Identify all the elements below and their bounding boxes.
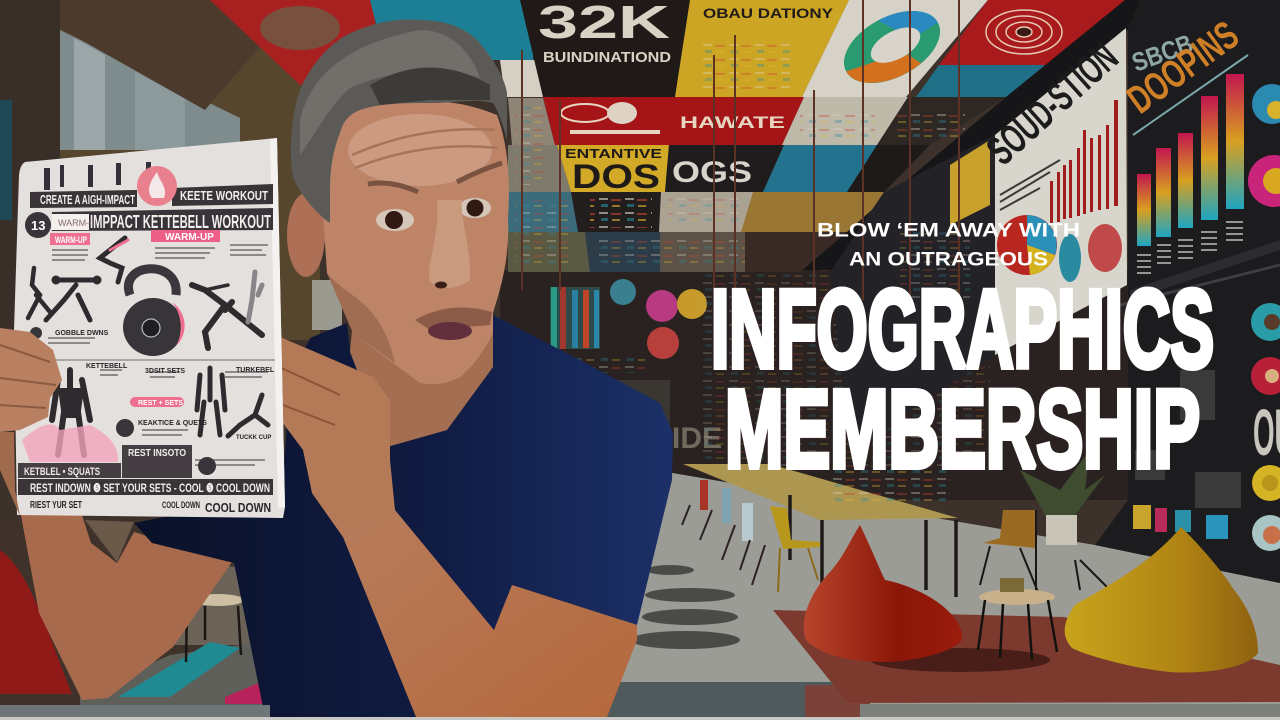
kettlebell bbox=[123, 269, 185, 356]
ceiling red spiral bbox=[986, 10, 1062, 54]
forearm right bbox=[312, 478, 637, 717]
subtitle: AN OUTRAGEOUS bbox=[849, 248, 1048, 270]
small kettlebells bbox=[30, 327, 216, 475]
neck bbox=[350, 320, 493, 447]
eye left bbox=[376, 209, 414, 231]
paper small labels: TUCKK CUP bbox=[236, 435, 271, 441]
warm-up labels bbox=[50, 230, 220, 245]
pink splash bbox=[22, 424, 118, 462]
ceiling red poster shapes bbox=[561, 102, 660, 132]
paper small labels bbox=[55, 330, 275, 441]
paper footer band: REST INDOWN ❺ SET YOUR SETS - COOL ❺ COOL DOWN bbox=[30, 481, 270, 495]
warm-up labels: WARM-UP bbox=[55, 235, 87, 245]
paper header: WARM– bbox=[58, 218, 91, 228]
hair highlights bbox=[300, 30, 480, 155]
hair bbox=[291, 20, 507, 223]
subtitle bbox=[817, 220, 1080, 270]
ceiling poster lettering: HAWATE bbox=[680, 113, 785, 132]
paper badge bbox=[25, 212, 51, 238]
paper header bbox=[30, 166, 273, 232]
finger lines bbox=[270, 365, 340, 425]
background: ceiling posters bbox=[210, 0, 1140, 450]
arm: left upper arm and forearm bbox=[20, 510, 232, 700]
paper bottom row: COOL DOWN bbox=[205, 500, 271, 515]
ceiling poster lettering: OBAU DATIONY bbox=[703, 5, 834, 21]
nose bbox=[429, 200, 470, 288]
background: floor bbox=[600, 470, 1280, 720]
background: mid wall bbox=[500, 270, 1140, 500]
paper header: IMPPACT KETTEBELL WORKOUT bbox=[90, 212, 271, 232]
ceiling poster lettering: DOS bbox=[572, 158, 660, 196]
paper small labels: KETTEBELL bbox=[86, 363, 128, 370]
cheek shade bbox=[327, 273, 395, 363]
rest band: REST INSOTO bbox=[128, 448, 186, 459]
paper small labels: TURKEBEL bbox=[236, 367, 275, 374]
ceiling poster lettering: BUINDINATIOND bbox=[543, 49, 671, 66]
background: stool left bbox=[186, 594, 244, 662]
rest band bbox=[122, 445, 192, 478]
eyebrow left bbox=[368, 183, 418, 192]
ceiling donut chart bbox=[832, 0, 952, 98]
bottom reflection strip bbox=[0, 705, 1280, 720]
rest and sets pill: REST + SETS bbox=[138, 400, 183, 407]
forehead highlight bbox=[348, 114, 492, 186]
background: white poster with bar chart: SOUD-STION bbox=[979, 34, 1127, 174]
paper header: KEETE WORKOUT bbox=[180, 188, 268, 203]
left hand bbox=[0, 328, 62, 516]
rug bbox=[773, 610, 1280, 703]
subtitle: BLOW ‘EM AWAY WITH bbox=[817, 220, 1080, 242]
paper badge: 13 bbox=[31, 218, 45, 233]
paper small labels: GOBBLE DWNS bbox=[55, 330, 109, 337]
face bbox=[322, 101, 509, 384]
eye right bbox=[459, 198, 491, 218]
moustache shadow bbox=[415, 308, 492, 330]
bodybuilder figure bbox=[58, 388, 84, 418]
ketbell band: KETBLEL • SQUATS bbox=[24, 466, 100, 478]
background: dark wall with colored bars: DOOPINS bbox=[1119, 13, 1247, 123]
background: white poster with bar chart bbox=[979, 28, 1127, 355]
hair dark curls bbox=[370, 68, 490, 105]
ceiling poster lettering bbox=[538, 0, 834, 196]
ceiling poster lettering: ENTANTIVE bbox=[565, 146, 662, 161]
forehead wrinkles bbox=[352, 129, 498, 168]
man bbox=[20, 20, 673, 717]
rest and sets pill bbox=[130, 397, 184, 407]
exercise figures bbox=[28, 238, 268, 455]
table with chairs bbox=[682, 450, 1110, 613]
background: patterned rug left bbox=[80, 642, 266, 705]
nostril bbox=[435, 282, 447, 288]
ear bbox=[287, 193, 325, 277]
paper small labels: 3DSIT SETS bbox=[145, 368, 185, 375]
mouth bbox=[428, 322, 472, 340]
paper small labels: KEAKTICE & QUETS bbox=[138, 420, 207, 427]
bean bag: yellow bbox=[1065, 527, 1258, 672]
paper top row figures bbox=[44, 162, 151, 190]
background: dark wall with colored bars bbox=[1095, 0, 1280, 583]
paper footer band bbox=[18, 479, 273, 495]
paper bottom row bbox=[30, 500, 271, 515]
title bbox=[711, 268, 1214, 491]
paper bottom row: COOL DOWN bbox=[162, 500, 200, 510]
side table bbox=[978, 578, 1057, 660]
background: dark wall with colored bars: SBCB bbox=[1128, 29, 1197, 78]
rug shadow bbox=[870, 648, 1050, 672]
paper header: CREATE A AIGH-IMPACT bbox=[40, 192, 135, 207]
paper bottom row: RIEST YUR SET bbox=[30, 500, 82, 511]
infographic paper bbox=[14, 138, 285, 518]
background: mid wall: IDE bbox=[672, 422, 722, 455]
ceiling poster lettering: OGS bbox=[672, 156, 752, 189]
paper small text blocks bbox=[20, 245, 275, 465]
t-shirt bbox=[134, 315, 673, 717]
hanging rods bbox=[522, 0, 959, 300]
warm-up labels: WARM-UP bbox=[165, 232, 214, 243]
eyebrow right bbox=[457, 163, 502, 182]
bean bag: red bbox=[804, 525, 962, 662]
hand right bbox=[268, 337, 395, 537]
background: red bean bag behind arm bbox=[0, 550, 72, 694]
